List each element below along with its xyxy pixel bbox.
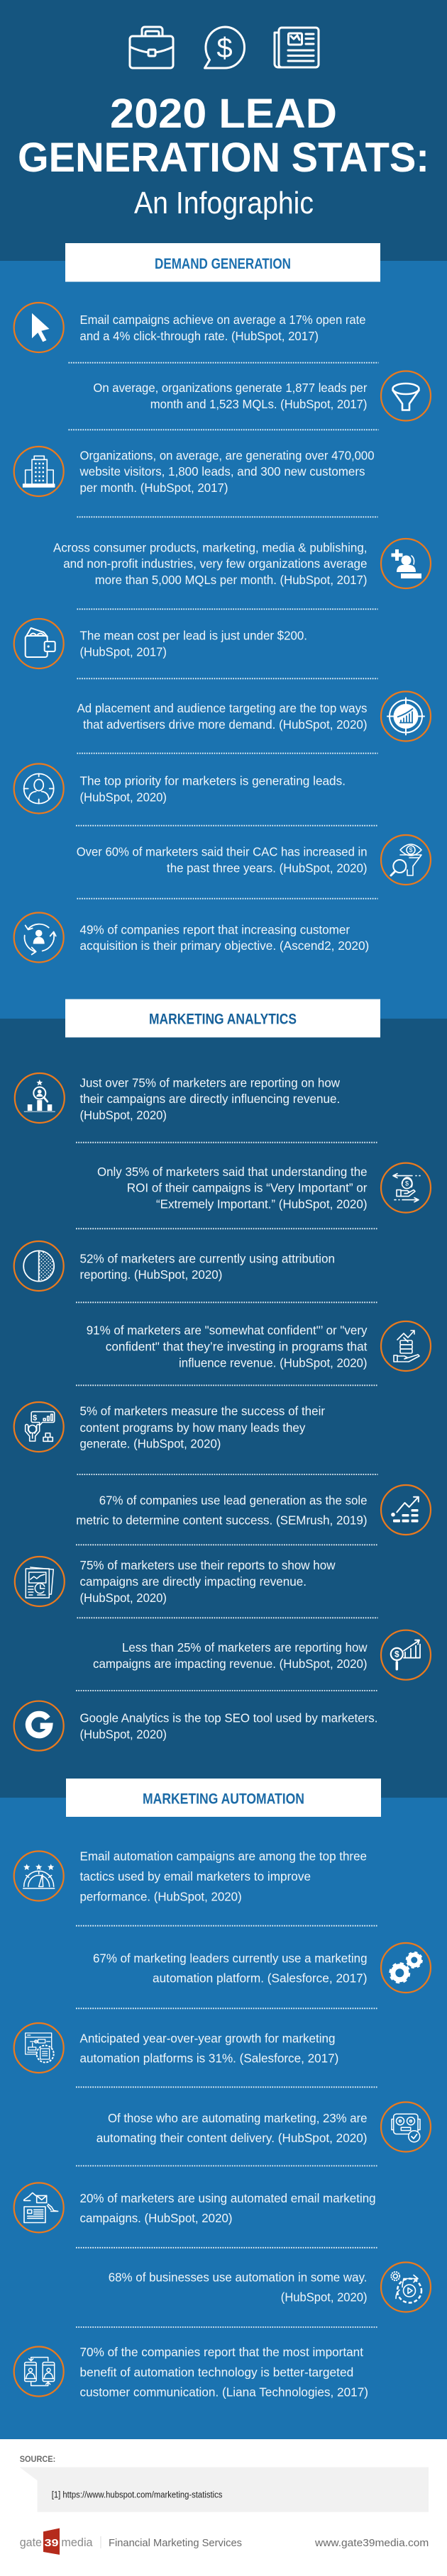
icon: coin in hand with arrows: $ [405,1180,409,1187]
text: reports: campaigns are directly impacting revenue. [79,1574,307,1589]
heading: marketing analytics: MARKETING ANALYTICS [149,1011,297,1028]
icon: speech chart and presenter [14,1402,64,1452]
source box [20,2467,429,2512]
tagline: Financial Marketing Services [109,2537,242,2549]
heading: marketing automation [66,1779,381,1817]
text: ROI: “Extremely Important.” (HubSpot, 2020) [156,1197,368,1211]
text: automated email: 20% of marketers are using automated email marketing [79,2191,376,2205]
icon: growth chart [381,1485,431,1535]
text: reports [79,1558,336,1605]
text: content programs: generate. (HubSpot, 2020) [79,1437,221,1451]
logo: gate39media [20,2528,93,2555]
icon: magnifier with bars [381,1630,431,1680]
stat: top priority [14,764,346,814]
stat: attribution reporting [14,1241,335,1291]
text: impacting revenue: campaigns are impacting revenue. (HubSpot, 2020) [93,1657,368,1671]
text: email campaigns: and a 4% click-through rate. (HubSpot, 2017) [79,329,319,343]
subtitle: An Infographic [134,186,314,220]
icon: dollar speech bubble: $ [216,33,233,64]
text: content delivery: Of those who are automating marketing, 23% are [108,2111,368,2125]
icon: newspaper [275,28,319,67]
text: leads per month: On average, organizations generate 1,877 leads per [93,381,367,395]
icon: person in target [14,764,64,814]
icon: briefcase [130,27,173,68]
text: email campaigns: Email campaigns achieve on average a 17% open rate [79,313,366,327]
icon: gears and play button [381,2263,431,2312]
text: attribution reporting: 52% of marketers are currently using attribution [79,1251,335,1265]
stat: targeted communication [14,2345,368,2399]
stat: automation in some way [109,2263,431,2312]
icon: speech chart and presenter: $ [33,1413,37,1422]
panel: demand generation background [0,261,447,1019]
text: targeted communication: 70% of the companies report that the most important [79,2345,363,2359]
text: email automation: performance. (HubSpot, 2020) [79,1889,242,1903]
text: website visitors: website visitors, 1,800 leads, and 300 new customers [79,464,365,478]
icon: eye, funnel and magnifier [381,835,431,885]
text: year-over-year growth [79,2031,338,2066]
icon: coins on hand with arrow [381,1321,431,1371]
stat: website visitors [14,447,375,496]
stat: year-over-year growth [14,2023,338,2073]
heading: demand generation [65,243,380,282]
stat: content programs [14,1402,325,1452]
text: mean cost per lead [79,629,307,659]
icon: cursor [14,303,64,352]
text: confidence [87,1323,368,1370]
text: email automation: Email automation campaigns are among the top three [79,1849,367,1864]
text: content delivery [96,2111,368,2145]
icon: funnel [381,371,431,421]
text: ad placement: that advertisers drive more demand. (HubSpot, 2020) [83,717,368,732]
text: influencing revenue: their campaigns are directly influencing revenue. [79,1092,340,1106]
title: 2020 LEAD [110,91,337,137]
text: impacting revenue: Less than 25% of marketers are reporting how [122,1640,368,1654]
text: mean cost per lead: (HubSpot, 2017) [79,645,167,659]
text: website visitors [79,448,375,495]
icon: report papers [15,1557,65,1606]
text: Google Analytics [79,1710,377,1741]
icon: robot arms and email [14,2183,64,2232]
text: email campaigns [79,313,366,343]
text: customer acquisition: 49% of companies report that increasing customer [79,922,350,936]
text: CAC [77,845,367,875]
stat: automated email [14,2183,376,2232]
text: CAC: Over 60% of marketers said their CAC has increased in [77,845,367,859]
text: targeted communication [79,2345,368,2399]
text: content programs: 5% of marketers measure the success of their [79,1404,325,1418]
text: ROI: ROI of their campaigns is “Very Important” or [127,1181,368,1195]
icon: office building [14,447,64,496]
text: confidence: influence revenue. (HubSpot, 2020) [179,1355,368,1370]
text: year-over-year growth: automation platforms is 31%. (Salesforce, 2017) [79,2051,338,2066]
text: sole metric: metric to determine content success. (SEMrush, 2019) [76,1513,368,1528]
text: automation platform: 67% of marketing leaders currently use a marketing [93,1951,368,1965]
icon: eye, funnel and magnifier: $ [409,846,413,853]
text: ROI [97,1165,368,1211]
text: customer acquisition [79,922,369,953]
text: content programs: content programs by how many leads they [79,1421,305,1435]
text: Google Analytics: Google Analytics is the top SEO tool used by marketers. [79,1710,377,1725]
icon: search person bars [15,1073,65,1123]
icon: person cycle [14,913,64,963]
icon: web workflow gear [14,2023,64,2073]
text: email automation [79,1849,367,1903]
icon: two phones [14,2346,64,2396]
logo: gate39media: gate [20,2536,42,2549]
text: top priority: (HubSpot, 2020) [79,790,167,805]
header icons [130,27,319,68]
text: attribution reporting [79,1251,335,1282]
icon: gauge and stars [14,1852,64,1901]
logo: gate39media: 39 [44,2537,58,2549]
icon: Google G [14,1701,64,1751]
text: ad placement: Ad placement and audience targeting are the top ways [77,701,368,715]
icon: add user [381,539,431,588]
source box: [1] https://www.hubspot.com/marketing-statistics [52,2490,223,2499]
text: sole metric: 67% of companies use lead generation as the sole [99,1493,368,1507]
icon: coin in hand with arrows [381,1163,431,1213]
text: ROI: Only 35% of marketers said that understanding the [97,1165,368,1179]
text: leads per month: month and 1,523 MQLs. (HubSpot, 2017) [150,397,367,411]
text: content programs [79,1404,325,1451]
text: MQLs per month: Across consumer products, marketing, media & publishing, [53,540,368,554]
text: automation platform [93,1951,368,1986]
text: targeted communication: benefit of automation technology is better-targeted [79,2365,353,2379]
icon: gears [381,1943,431,1993]
stat: Google Analytics [14,1701,377,1751]
text: CAC: the past three years. (HubSpot, 2020) [167,861,368,875]
text: automated email: campaigns. (HubSpot, 2020) [79,2211,233,2225]
text: influencing revenue: Just over 75% of marketers are reporting on how [79,1075,340,1090]
text: targeted communication: customer communication. (Liana Technologies, 2017) [79,2385,368,2399]
heading: marketing automation: MARKETING AUTOMATION [143,1791,304,1807]
title [18,91,429,181]
text: top priority [79,774,346,805]
panel: header background [0,0,447,261]
text: MQLs per month: more than 5,000 MQLs per month. (HubSpot, 2017) [95,573,368,587]
stat: email campaigns [14,303,366,352]
text: year-over-year growth: Anticipated year-over-year growth for marketing [79,2031,335,2045]
text: website visitors: per month. (HubSpot, 2017) [79,481,228,495]
icon: dollar speech bubble [204,27,244,68]
heading: marketing analytics [65,999,380,1038]
icon: target chart [381,692,431,741]
text: MQLs per month: and non-profit industries, very few organizations average [63,556,368,571]
text: automation platform: automation platform. (Salesforce, 2017) [153,1971,368,1986]
text: top priority: The top priority for marketers is generating leads. [79,774,346,788]
text: mean cost per lead: The mean cost per lead is just under $200. [79,629,307,643]
stat: influencing revenue [15,1073,340,1123]
text: influencing revenue [79,1075,340,1122]
stat: ad placement [77,692,431,741]
panel: marketing automation background [0,1798,447,2439]
title: GENERATION STATS: [18,135,429,181]
text: email automation: tactics used by email marketers to improve [79,1869,311,1883]
text: automation in some way: (HubSpot, 2020) [281,2290,368,2305]
stat: impacting revenue [93,1630,431,1680]
stat: sole metric [76,1485,431,1535]
text: website visitors: Organizations, on average, are generating over 470,000 [79,448,375,462]
stat: leads per month [93,371,431,421]
website: www.gate39media.com [314,2537,429,2549]
text: reports: 75% of marketers use their reports to show how [79,1558,336,1572]
icon: half dotted circle [14,1241,64,1291]
text: reports: (HubSpot, 2020) [79,1591,167,1605]
heading: demand generation: DEMAND GENERATION [155,256,291,272]
text: MQLs per month [53,540,368,587]
stat: content delivery [96,2102,431,2152]
panel: marketing analytics background [0,1019,447,1798]
text: sole metric [76,1493,368,1528]
stat: email automation [14,1849,367,1903]
text: confidence: 91% of marketers are "somewhat confident"’ or "very [87,1323,368,1338]
stat: MQLs per month [53,539,431,588]
text: leads per month [93,381,368,411]
icon: wallet [14,619,64,668]
stat: ROI [97,1163,431,1213]
text: impacting revenue [93,1640,368,1671]
text: automation in some way: 68% of businesses use automation in some way. [109,2270,367,2285]
text: ad placement [77,701,368,732]
text: influencing revenue: (HubSpot, 2020) [79,1108,167,1122]
stat: automation platform [93,1943,431,1993]
text: confidence: confident" that they’re investing in programs that [106,1340,368,1354]
text: automated email [79,2191,376,2225]
stat: customer acquisition [14,913,369,963]
text: Google Analytics: (HubSpot, 2020) [79,1727,167,1741]
source label: SOURCE: [20,2454,55,2464]
text: automation in some way [109,2270,367,2305]
stat: reports [15,1557,336,1606]
stat: mean cost per lead [14,619,307,668]
text: attribution reporting: reporting. (HubSpot, 2020) [79,1267,222,1282]
logo: gate39media: media [61,2536,93,2549]
stat: CAC [77,835,431,885]
stat: confidence [87,1321,431,1371]
text: content delivery: automating their content delivery. (HubSpot, 2020) [96,2131,368,2145]
text: customer acquisition: acquisition is their primary objective. (Ascend2, 2020) [79,939,369,953]
icon: magnifier with bars: $ [394,1650,399,1659]
icon: robot face with check [381,2102,431,2152]
